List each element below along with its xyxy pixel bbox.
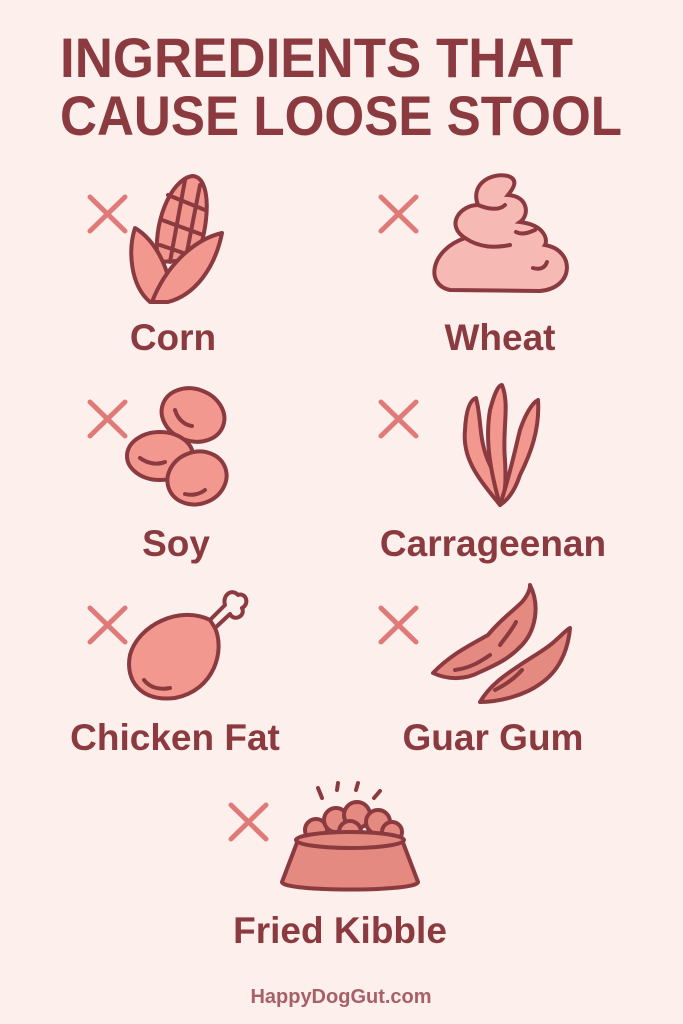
item: wheat [381, 175, 567, 358]
icon: x mark carrageenan [381, 402, 416, 436]
icon: x mark chicken [90, 608, 125, 642]
item: corn [90, 176, 222, 358]
footer: website: HappyDogGut.com [250, 986, 432, 1008]
label: guar gum: Guar Gum [403, 717, 583, 758]
title: INGREDIENTS THAT [60, 26, 573, 89]
item: guar gum [381, 585, 583, 758]
title: CAUSE LOOSE STOOL [60, 84, 622, 147]
item: soy [90, 380, 234, 564]
item: chicken fat [70, 592, 280, 758]
title [60, 26, 622, 147]
item: carrageenan [380, 385, 606, 564]
icon: x mark guar gum [381, 608, 416, 642]
label: carrageenan: Carrageenan [380, 523, 606, 564]
label: wheat: Wheat [444, 317, 556, 358]
icon: x mark corn [90, 197, 125, 231]
icon: pods [433, 585, 570, 702]
icon: x mark wheat [381, 197, 416, 231]
icon: beans [127, 380, 234, 513]
icon: poop [434, 175, 567, 291]
label: soy: Soy [142, 523, 210, 564]
icon: bowl [282, 783, 418, 890]
icon: drumstick [129, 592, 246, 698]
item: fried kibble [231, 783, 447, 951]
label: chicken fat: Chicken Fat [70, 717, 280, 758]
icon: x mark soy [90, 402, 125, 436]
label: fried kibble: Fried Kibble [233, 910, 447, 951]
label: corn: Corn [130, 317, 216, 358]
icon: x mark kibble [231, 805, 266, 839]
icon: corn [131, 176, 222, 302]
icon: seaweed [465, 385, 538, 505]
